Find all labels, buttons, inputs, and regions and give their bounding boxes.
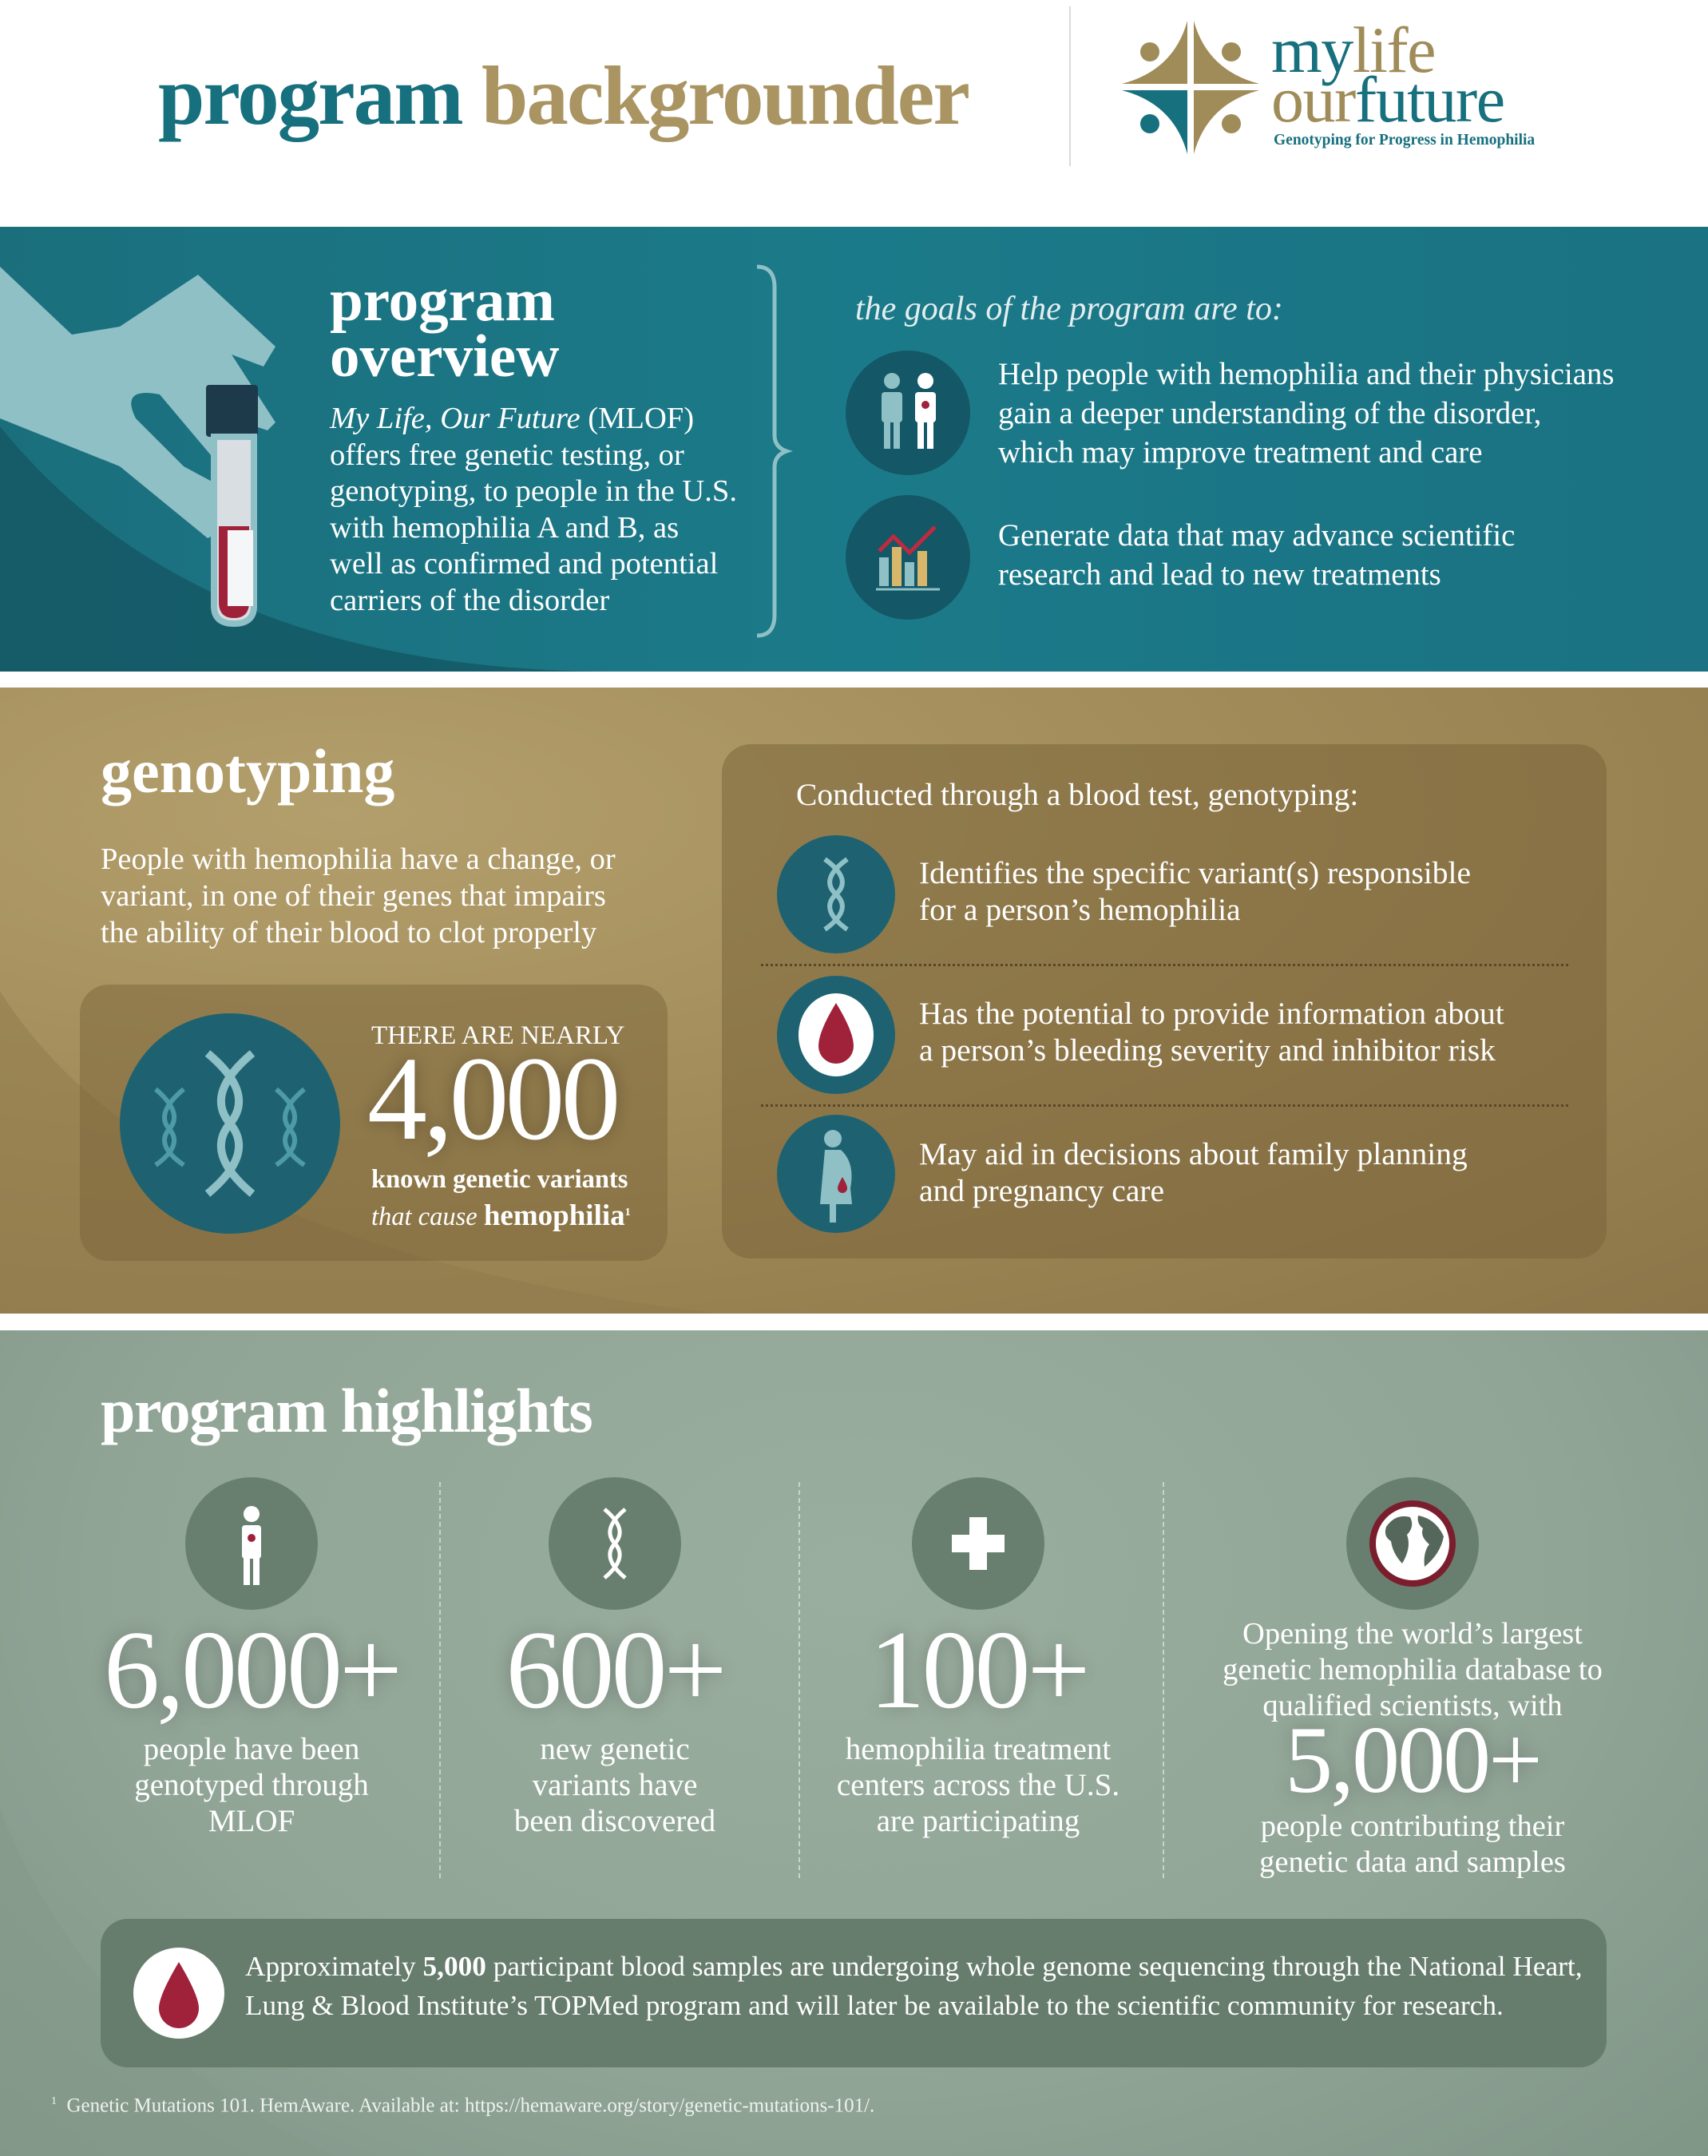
logo icon xyxy=(1122,21,1259,154)
stat: 6000 people xyxy=(102,1477,399,1838)
panel: program highlights xyxy=(0,1330,1708,2156)
stat box: 4000 variants xyxy=(80,985,668,1261)
panel: genotyping benefits xyxy=(722,744,1607,1258)
text: genotyping intro: People with hemophilia have a change, or xyxy=(101,842,616,876)
text: item 2 xyxy=(919,996,1504,1068)
stat: 100 centers xyxy=(837,1477,1120,1838)
text: item 1: for a person’s hemophilia xyxy=(919,892,1241,927)
stat: 600 variants: been discovered xyxy=(514,1804,715,1838)
icon: dna xyxy=(549,1477,681,1610)
text: goal 2: research and lead to new treatments xyxy=(998,557,1441,592)
stat: 5000 contributors: people contributing their xyxy=(1261,1809,1564,1843)
panel: program overview xyxy=(0,227,1708,672)
stat: 100 centers: 100+ xyxy=(870,1608,1087,1732)
callout: TOPMed sequencing xyxy=(101,1919,1607,2067)
stat: 6000 people: 6,000+ xyxy=(104,1608,399,1732)
text: goal 1 xyxy=(998,357,1614,470)
text: overview body: offers free genetic testing, or xyxy=(330,438,684,471)
brace xyxy=(757,265,793,637)
text: item 1 xyxy=(919,855,1471,927)
logo: Genotyping for Progress in Hemophilia xyxy=(1274,132,1535,149)
heading: program overview: overview xyxy=(330,323,559,390)
icon: blood drop xyxy=(133,1948,224,2039)
text: overview body xyxy=(329,402,737,616)
stat: 100 centers: hemophilia treatment xyxy=(846,1732,1111,1766)
text: item 3 xyxy=(919,1136,1468,1208)
stat: 5000 contributors: genetic data and samples xyxy=(1259,1845,1566,1879)
text: item 2: Has the potential to provide information about xyxy=(919,996,1504,1031)
icon: dna circle xyxy=(120,1013,340,1234)
heading: program highlights: program highlights xyxy=(101,1376,592,1445)
text: TOPMed: Lung & Blood Institute’s TOPMed program and will later be available to the scientific community for research. xyxy=(245,1990,1504,2021)
text: there are nearly: THERE ARE NEARLY xyxy=(371,1021,625,1050)
text: overview body: My Life, Our Future (MLOF) xyxy=(330,402,694,435)
stat: 5000 contributors: Opening the world’s largest xyxy=(1242,1617,1583,1651)
text: 4,000: 4,000 xyxy=(367,1032,616,1165)
stat: 5000 contributors: 5,000+ xyxy=(1285,1706,1540,1813)
text: item 3: and pregnancy care xyxy=(919,1173,1164,1208)
panel: genotyping xyxy=(0,688,1708,1314)
text: overview body: well as confirmed and potential xyxy=(330,547,718,581)
heading: goals: the goals of the program are to: xyxy=(855,291,1283,327)
heading: program overview: program xyxy=(330,268,555,334)
stat: 600 variants: 600+ xyxy=(506,1608,723,1732)
heading: genotyping: genotyping xyxy=(101,736,394,806)
stat: 600 variants xyxy=(505,1477,723,1838)
icon: medical cross xyxy=(912,1477,1044,1610)
text: goal 1: gain a deeper understanding of the disorder, xyxy=(998,396,1541,430)
heading: program overview xyxy=(330,268,559,390)
icon: globe xyxy=(1346,1477,1479,1610)
text: goal 1: Help people with hemophilia and their physicians xyxy=(998,357,1614,391)
logo wordmark: mylife xyxy=(1271,14,1435,86)
stat: 5000 contributors: genetic hemophilia database to xyxy=(1223,1653,1603,1686)
text: TOPMed xyxy=(245,1951,1583,2021)
text: known genetic variants xyxy=(371,1165,631,1232)
text: known genetic variants: that cause hemophilia1 xyxy=(371,1199,631,1232)
text: goal 1: which may improve treatment and care xyxy=(998,435,1482,470)
text: overview body: carriers of the disorder xyxy=(330,583,609,616)
icon: hand holding blood tube xyxy=(0,267,275,627)
text: TOPMed: Approximately 5,000 participant blood samples are undergoing whole genome sequencing through the National Heart, xyxy=(245,1951,1583,1982)
stat: 5000 contributors xyxy=(1223,1477,1603,1879)
icon: dna xyxy=(777,835,895,953)
text: known genetic variants: known genetic variants xyxy=(371,1165,628,1194)
stat: 600 variants: variants have xyxy=(533,1768,697,1802)
heading: conducted through blood test: Conducted through a blood test, genotyping: xyxy=(796,777,1358,812)
text: goal 2 xyxy=(998,518,1515,592)
text: goal 2: Generate data that may advance scientific xyxy=(998,518,1515,553)
text: genotyping intro: the ability of their blood to clot properly xyxy=(101,916,596,949)
icon: bar chart xyxy=(846,495,970,620)
text: item 3: May aid in decisions about family planning xyxy=(919,1136,1468,1171)
stat: 6000 people: genotyped through xyxy=(134,1768,369,1802)
footnote: 1 Genetic Mutations 101. HemAware. Available at: https://hemaware.org/story/genetic-mutations-101/. xyxy=(51,2095,874,2116)
stat: 100 centers: are participating xyxy=(877,1804,1080,1838)
text: overview body: with hemophilia A and B, as xyxy=(330,511,679,545)
stat: 6000 people: people have been xyxy=(144,1732,359,1766)
stat: 600 variants: new genetic xyxy=(540,1732,690,1766)
logo: ourfuture xyxy=(1271,63,1504,136)
stat: 5000 contributors: qualified scientists, with xyxy=(1262,1689,1563,1722)
icon: patient and doctor xyxy=(846,351,970,475)
logo xyxy=(1122,14,1535,154)
icon: blood drop xyxy=(777,976,895,1094)
header: title: program backgrounder xyxy=(158,49,969,142)
stat: 6000 people: MLOF xyxy=(208,1804,295,1838)
text: item 2: a person’s bleeding severity and inhibitor risk xyxy=(919,1032,1496,1068)
text: genotyping intro xyxy=(101,842,616,949)
text: overview body: genotyping, to people in the U.S. xyxy=(330,474,737,508)
text: genotyping intro: variant, in one of their genes that impairs xyxy=(101,879,606,913)
text: item 1: Identifies the specific variant(s) responsible xyxy=(919,855,1471,890)
icon: person xyxy=(185,1477,318,1610)
stat: 100 centers: centers across the U.S. xyxy=(837,1768,1120,1802)
icon: pregnant woman xyxy=(777,1115,895,1233)
